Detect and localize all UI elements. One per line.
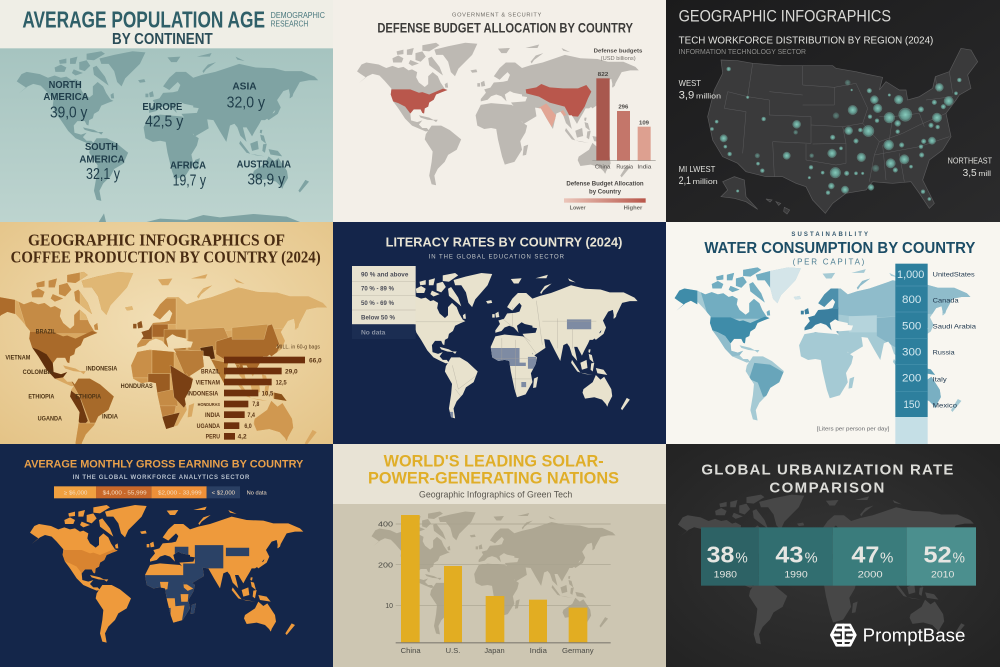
title: BY CONTINENT <box>112 31 213 48</box>
legend: allocation scale <box>564 182 646 212</box>
map background <box>0 48 334 222</box>
bar chart: solar generation: China <box>401 646 421 655</box>
bar chart: coffee production: MILL. in 60-g bags <box>277 345 321 351</box>
callout: west <box>679 78 721 102</box>
subtitle: IN THE GLOBAL EDUCATION SECTOR <box>429 254 565 260</box>
panel: water consumption <box>666 222 1000 444</box>
value scale column <box>895 264 928 444</box>
bar chart: coffee production: INDONESIA <box>187 391 219 397</box>
legend: allocation scale: by Country <box>589 189 622 195</box>
country labels: UnitedStates <box>933 272 975 279</box>
world map <box>30 505 303 643</box>
world map <box>414 273 638 418</box>
bar chart: coffee production: HONDURAS <box>198 402 220 407</box>
stat: 1990 <box>775 541 818 579</box>
legend: No data <box>247 490 267 496</box>
bar chart: solar generation: Japan <box>484 646 505 655</box>
country labels <box>933 272 977 409</box>
bar chart: solar generation: U.S. <box>446 646 460 655</box>
sector label: INFORMATION TECHNOLOGY SECTOR <box>679 47 806 56</box>
map labels: ETHIOPIA <box>28 394 55 400</box>
label: north america <box>43 80 89 121</box>
bar chart: solar generation: 400 <box>378 520 393 529</box>
callout: northeast: NORTHEAST <box>948 157 992 166</box>
title: COMPARISON <box>769 480 884 497</box>
legend <box>54 486 267 498</box>
bar chart: coffee production: 7,8 <box>252 402 260 408</box>
bar chart: defense budgets: 109 <box>639 120 649 126</box>
bar chart: coffee production: 66,0 <box>309 359 322 365</box>
subtitle: IN THE GLOBAL WORKFORCE ANALYTICS SECTOR <box>73 475 250 481</box>
callout: midwest <box>679 164 718 187</box>
stat: 1980 <box>707 541 748 579</box>
per capita subtitle: (PER CAPITA) <box>793 258 865 267</box>
bar chart: defense budgets: 296 <box>618 104 628 110</box>
label: north america: 39,0 y <box>50 104 87 121</box>
title <box>368 452 619 487</box>
stat: 2010: 52 <box>923 541 952 567</box>
us map <box>708 48 978 214</box>
country labels: Saudi Arabia <box>933 323 977 330</box>
bar chart: coffee production <box>187 345 322 441</box>
subtitle: demographic research <box>271 11 325 29</box>
bar chart: coffee production: 29,0 <box>285 369 298 375</box>
stat: 1980: % <box>735 550 748 566</box>
label: asia <box>227 81 265 111</box>
bar chart: coffee production: UGANDA <box>197 424 221 430</box>
bar chart: solar generation: Germany <box>562 646 594 655</box>
map labels <box>5 329 153 422</box>
legend: < $2,000 <box>212 490 235 496</box>
choropleth world map <box>0 272 327 444</box>
title: LITERACY RATES BY COUNTRY (2024) <box>386 235 622 250</box>
callout: northeast: mill <box>978 169 991 178</box>
stat: 1990: 1990 <box>784 569 808 579</box>
stat: 2000: 2000 <box>858 569 883 579</box>
callout: west: 3,9 <box>679 90 694 102</box>
panel: urbanization rate <box>666 444 1000 667</box>
stat: 2000 <box>851 541 893 579</box>
country labels: Italy <box>933 377 948 384</box>
value scale column: 1,000 <box>897 269 924 281</box>
bar chart: defense budgets: China <box>595 165 611 171</box>
callout: west: million <box>696 92 721 101</box>
title: AVERAGE POPULATION AGE <box>22 6 265 32</box>
choropleth world map <box>675 261 975 421</box>
comparison band <box>701 527 976 586</box>
label: africa <box>170 161 206 189</box>
panel: solar power <box>333 444 666 667</box>
bar chart: defense budgets: Defense budgets <box>594 48 642 54</box>
legend: No data <box>361 329 386 336</box>
legend: allocation scale: Defense Budget Allocation <box>566 182 644 188</box>
antarctica <box>99 213 300 222</box>
map labels: INDONESIA <box>86 366 118 372</box>
eyebrow: GOVERNMENT & SECURITY <box>452 12 542 18</box>
panel: tech workforce <box>666 0 1000 222</box>
label: africa: AFRICA <box>170 161 206 172</box>
label: south america: SOUTH <box>85 142 118 153</box>
callout: midwest: MI LWEST <box>679 164 716 174</box>
bar chart: defense budgets: (USD billions) <box>601 56 636 62</box>
stat: 1980: 1980 <box>714 569 737 579</box>
wordmark: PromptBase <box>863 624 965 645</box>
subtitle: Geographic Infographics of Green Tech <box>419 489 572 499</box>
map labels: ETHIOPIA <box>75 394 102 400</box>
subtitle: demographic research: DEMOGRAPHIC <box>271 11 325 20</box>
label: australia: AUSTRALIA <box>237 160 291 171</box>
legend <box>352 266 416 339</box>
subtitle: demographic research: RESEARCH <box>271 20 309 29</box>
panel: defense budget <box>333 0 666 222</box>
legend: Below 50 % <box>361 314 395 321</box>
bar chart: defense budgets: 822 <box>598 72 608 78</box>
value scale column: 150 <box>903 399 920 411</box>
label: asia: 32,0 y <box>227 94 265 111</box>
eyebrow: SUSTAINABILITY <box>791 232 868 238</box>
title: GEOGRAPHIC INFOGRAPHICS OF <box>28 230 285 249</box>
panel: literacy rates <box>333 222 666 444</box>
title: GLOBAL URBANIZATION RATE <box>701 462 953 479</box>
world map with highlighted countries <box>357 43 639 185</box>
label: australia <box>237 160 291 189</box>
label: south america: AMERICA <box>79 154 125 165</box>
stat: 2010 <box>923 541 965 579</box>
bar chart: coffee production: VIETNAM <box>196 380 220 386</box>
callout: midwest: million <box>693 177 718 186</box>
legend: 70 % - 89 % <box>361 286 394 293</box>
bar chart: solar generation: India <box>530 646 548 655</box>
legend: ≥ $6,000 <box>64 490 87 496</box>
stat: 1980: 38 <box>707 541 734 567</box>
stat: 2000: % <box>880 550 893 566</box>
map labels: VIETNAM <box>5 356 30 362</box>
bar chart: solar generation <box>378 515 611 655</box>
bar chart: defense budgets: Russia <box>616 165 634 171</box>
bar chart: coffee production: BRAZIL <box>201 369 220 375</box>
bar chart: defense budgets <box>592 48 656 171</box>
callout: northeast: 3,5 <box>963 168 977 179</box>
value scale column: 300 <box>902 346 921 358</box>
stat: 2010: % <box>953 550 965 566</box>
title: WORLD'S LEADING SOLAR- <box>384 452 604 471</box>
panel: average population age <box>0 0 333 222</box>
stat: 1990: 43 <box>775 541 803 567</box>
title <box>11 230 321 267</box>
title: POWER-GENERATING NATIONS <box>368 468 619 487</box>
map labels: BRAZIL <box>36 329 56 335</box>
legend: 50 % - 69 % <box>361 300 394 307</box>
callout: northeast <box>948 157 992 179</box>
legend: $2,000 - 33,999 <box>158 490 202 496</box>
world map <box>17 51 318 201</box>
label: europe: EUROPE <box>142 102 182 113</box>
label: asia: ASIA <box>232 81 257 92</box>
subtitle: TECH WORKFORCE DISTRIBUTION BY REGION (2024) <box>679 35 933 46</box>
bar chart: solar generation: 200 <box>378 560 393 569</box>
map labels: COLOMBIA <box>23 370 54 376</box>
value scale column: 800 <box>902 294 921 306</box>
title <box>701 462 953 497</box>
stat: 2010: 2010 <box>931 569 954 579</box>
label: europe <box>142 102 183 131</box>
header band <box>333 444 667 504</box>
callout: west: WEST <box>679 78 702 88</box>
country labels: Russia <box>933 349 955 356</box>
panel: monthly earnings <box>0 444 333 667</box>
bar chart: defense budgets: India <box>637 165 652 171</box>
label: europe: 42,5 y <box>145 114 183 131</box>
title <box>22 6 265 48</box>
value scale column: 200 <box>902 373 921 385</box>
logo: promptbase <box>831 624 965 645</box>
country labels: Canada <box>933 297 959 304</box>
icon: brain <box>831 625 855 645</box>
title: WATER CONSUMPTION BY COUNTRY <box>704 240 976 257</box>
bar chart: coffee production: 7,4 <box>247 413 256 419</box>
unit note: [Liters per person per day] <box>817 427 890 433</box>
workforce density bubbles <box>710 67 961 201</box>
label: north america: NORTH <box>49 80 82 91</box>
bar chart: coffee production: 12,5 <box>276 380 287 386</box>
panel: coffee production <box>0 222 333 444</box>
label: australia: 38,9 y <box>247 172 285 189</box>
world map <box>371 512 616 634</box>
country labels: Mexico <box>933 402 958 409</box>
value scale column: 500 <box>902 320 921 332</box>
bar chart: coffee production: INDIA <box>205 413 221 419</box>
stat: 2000: 47 <box>851 541 879 567</box>
world map <box>678 495 974 644</box>
map labels: UGANDA <box>38 416 63 422</box>
label: north america: AMERICA <box>43 92 89 103</box>
bar chart: coffee production: 10,5 <box>262 391 274 397</box>
legend: allocation scale: Higher <box>624 206 643 212</box>
stat: 1990: % <box>805 550 818 566</box>
main title: GEOGRAPHIC INFOGRAPHICS <box>679 8 891 26</box>
label: south america <box>79 142 125 183</box>
bar chart: coffee production: PERU <box>206 435 220 441</box>
legend: allocation scale: Lower <box>570 206 586 212</box>
bar chart: coffee production: 4,2 <box>238 435 247 441</box>
map labels: INDIA <box>102 415 119 421</box>
bar chart: coffee production: 6,0 <box>244 424 252 430</box>
label: africa: 19,7 y <box>173 172 206 189</box>
map labels: HONDURAS <box>121 384 153 390</box>
title: AVERAGE MONTHLY GROSS EARNING BY COUNTRY <box>24 458 304 470</box>
callout: midwest: 2,1 <box>679 175 691 187</box>
legend: 90 % and above <box>361 271 409 278</box>
legend: $4,000 - 55,999 <box>103 490 147 496</box>
bar chart: solar generation: 10 <box>385 601 393 610</box>
label: south america: 32,1 y <box>86 166 120 183</box>
